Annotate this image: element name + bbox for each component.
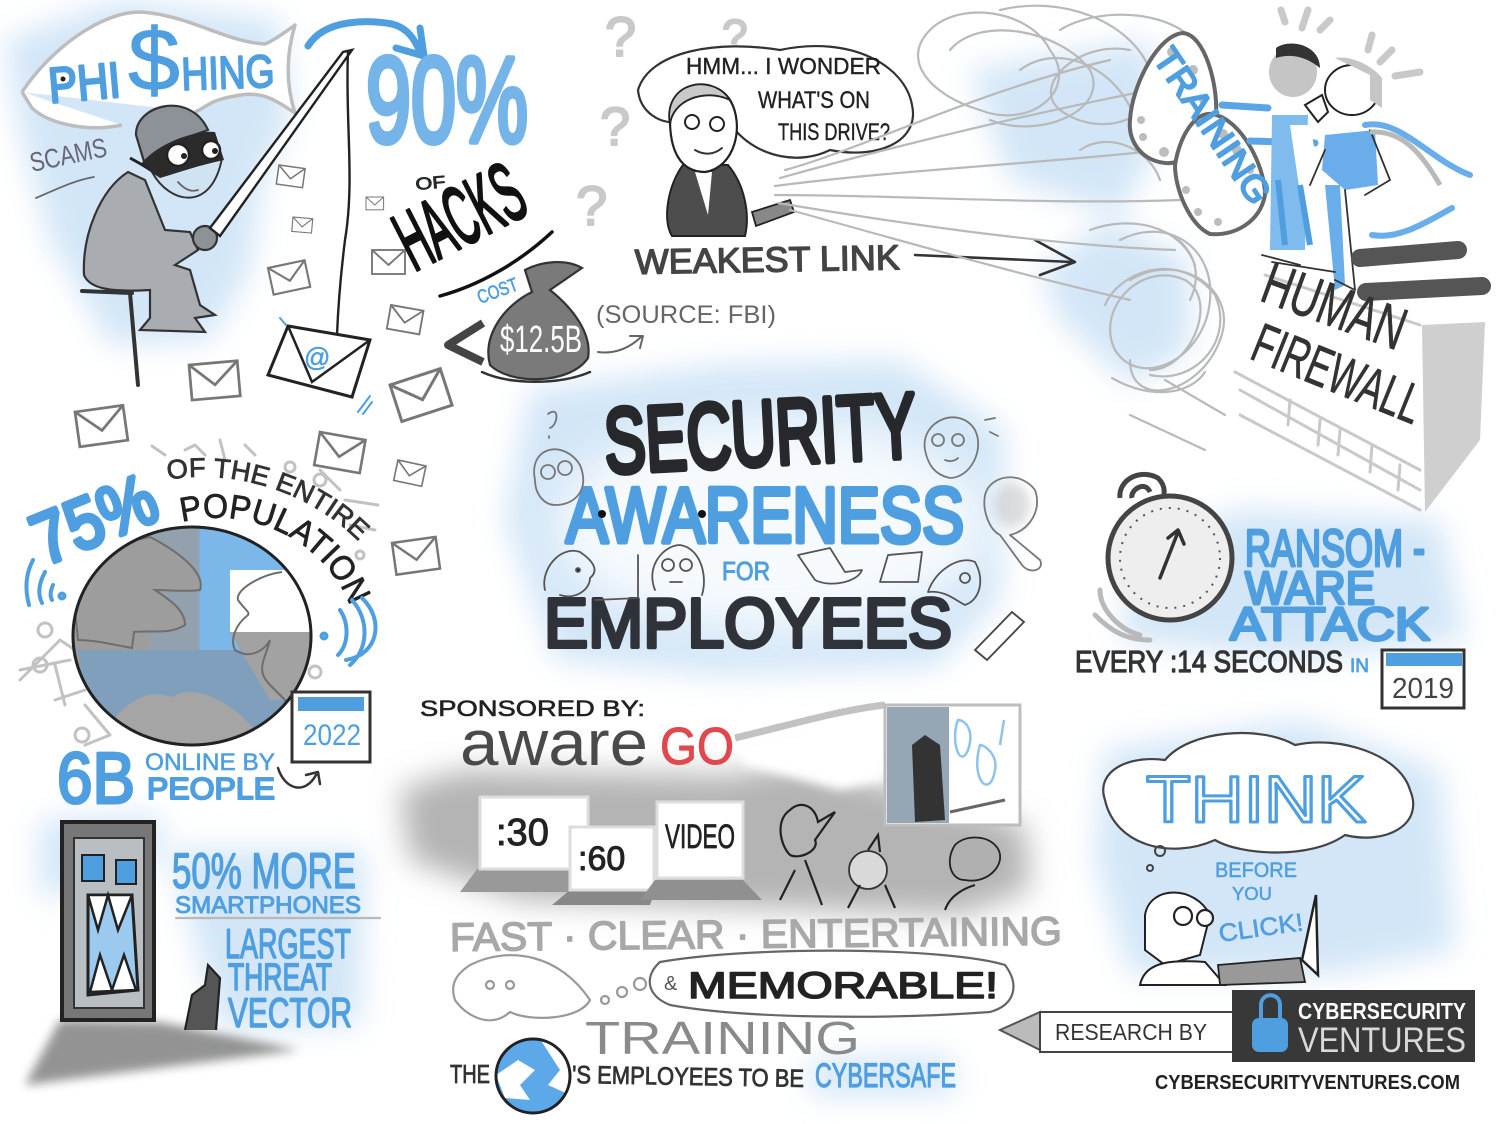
label: fast clear entertaining: FAST · CLEAR · ENTERTAINING	[450, 910, 1062, 960]
label: every 14 seconds: EVERY :14 SECONDS	[1075, 644, 1343, 679]
label: the: THE	[450, 1059, 490, 1089]
research arrow banner	[1000, 1012, 1234, 1052]
money bag	[475, 262, 590, 382]
blue arrow to stat	[308, 22, 424, 56]
heading: phishing: PHI	[46, 52, 123, 114]
icon: usb drive	[975, 612, 1024, 660]
training egg one	[1130, 33, 1216, 163]
scams underline	[36, 177, 94, 198]
memorable bubble	[650, 951, 1013, 1017]
heading: phishing: $	[128, 10, 180, 109]
panel: ransomware	[1075, 474, 1464, 708]
brick wall	[1235, 250, 1485, 512]
label: ransom-: RANSOM -	[1245, 520, 1425, 578]
logo: awarego: aware	[460, 707, 648, 779]
memorable bubble: MEMORABLE!	[688, 965, 998, 1006]
label: you: YOU	[1232, 884, 1272, 904]
label: online by: ONLINE BY	[145, 749, 275, 776]
panel: think before you click	[1103, 733, 1413, 985]
label: sponsored by: SPONSORED BY:	[420, 696, 645, 721]
label: weakest link: WEAKEST LINK	[634, 238, 900, 282]
panel: weakest link	[576, 5, 1075, 282]
logo: awarego	[460, 707, 734, 779]
smartphones rule	[176, 917, 380, 919]
statistic: 75%: 75%	[20, 459, 169, 581]
memorable bubble: &	[664, 973, 678, 995]
logo: cybersecurity ventures: CYBERSECURITY	[1298, 998, 1466, 1024]
laptop video	[640, 802, 762, 900]
heading: phishing	[46, 10, 275, 114]
connected people doodles	[20, 440, 378, 745]
logo: cybersecurity ventures: VENTURES	[1298, 1021, 1466, 1060]
arrow to firewall	[915, 240, 1075, 275]
label: vector: VECTOR	[228, 989, 352, 1036]
dog doodle	[453, 955, 646, 1020]
label: of the entire: OF THE ENTIRE	[167, 458, 370, 541]
laptop :30	[460, 797, 588, 892]
label: threat: THREAT	[228, 957, 332, 999]
audience silhouettes	[780, 805, 1000, 910]
calendar 2019: 2019	[1392, 673, 1454, 705]
label: employees to be: 'S EMPLOYEES TO BE	[572, 1061, 804, 1093]
speech bubble: THIS DRIVE?	[778, 119, 890, 146]
calendar 2022	[292, 692, 370, 762]
human figures	[1222, 10, 1470, 290]
thought cloud	[1103, 733, 1413, 852]
scattered emails	[75, 165, 452, 575]
research arrow banner: RESEARCH BY	[1055, 1019, 1207, 1045]
question marks: ?	[576, 174, 607, 237]
website url: CYBERSECURITYVENTURES.COM	[1155, 1072, 1460, 1094]
panel: human firewall	[775, 6, 1485, 512]
logo: cybersecurity ventures	[1232, 990, 1475, 1062]
calendar arrow	[278, 768, 320, 788]
laptop video: VIDEO	[665, 818, 735, 856]
title: awareness: AWARENESS	[566, 471, 964, 559]
label: attack: ATTACK	[1230, 598, 1430, 650]
source arrow	[598, 336, 643, 352]
panel: smartphones	[25, 822, 380, 1085]
floor shadow	[25, 1020, 300, 1085]
title: employees: EMPLOYEES	[544, 584, 952, 662]
gray theatre wash	[400, 705, 1030, 915]
source label: (SOURCE: FBI)	[596, 301, 776, 329]
mini globe	[496, 1039, 570, 1113]
gray scribble attacks	[775, 6, 1225, 450]
heading: phishing: HING	[181, 45, 275, 100]
monster phone	[62, 822, 154, 1020]
calendar 2022: 2022	[303, 719, 361, 752]
envelope on hook: @	[304, 342, 330, 372]
question marks: ?	[600, 97, 630, 157]
thought dots	[1147, 846, 1165, 871]
stopwatch	[1095, 474, 1232, 640]
laptop :60: :60	[578, 840, 625, 878]
label: of: OF	[415, 172, 446, 194]
globe	[70, 525, 315, 750]
panel: phishing	[22, 10, 452, 575]
statistic: 6b: 6B	[57, 739, 135, 819]
label: people: PEOPLE	[147, 771, 275, 806]
curious employee	[667, 84, 794, 236]
fishing rod and line	[210, 50, 352, 335]
panel: 90 percent of hacks	[366, 32, 776, 382]
label: ware: WARE	[1245, 562, 1375, 614]
statistic: 90%: 90%	[366, 32, 528, 168]
panel: population online	[18, 438, 380, 819]
wifi waves	[26, 560, 376, 665]
envelope on hook	[268, 318, 372, 414]
speech bubble: HMM... I WONDER	[686, 53, 881, 79]
label: scams: SCAMS	[27, 132, 110, 178]
laptop :30: :30	[496, 812, 549, 854]
projector screen	[885, 705, 1020, 825]
label: human: HUMAN	[1254, 249, 1416, 363]
laptop :60	[552, 827, 655, 905]
thief illustration	[82, 106, 224, 385]
panel: main title	[534, 375, 1041, 662]
label: hacks: HACKS	[379, 144, 540, 288]
money bag: $12.5B	[500, 319, 582, 361]
question marks: ?	[605, 5, 636, 68]
label: click: CLICK!	[1217, 908, 1305, 948]
title: security: SECURITY	[602, 375, 919, 493]
label: in: IN	[1350, 656, 1369, 677]
label: before: BEFORE	[1215, 859, 1297, 882]
question marks	[576, 5, 748, 237]
label: cybersafe: CYBERSAFE	[815, 1057, 956, 1095]
white glow behind title	[555, 420, 985, 630]
panel: research credit	[1000, 990, 1475, 1094]
arrow pointer left	[448, 323, 483, 362]
hacks underline	[440, 232, 552, 296]
person at computer	[1140, 892, 1318, 985]
label: training: TRAINING	[1145, 40, 1280, 212]
label: smartphones: SMARTPHONES	[175, 892, 361, 919]
employee doodles	[534, 412, 1041, 660]
speech bubble: WHAT'S ON	[758, 87, 870, 114]
speech bubble	[638, 46, 913, 158]
label: population: POPULATION	[180, 494, 371, 604]
title: for: FOR	[722, 556, 770, 586]
question marks: ?	[722, 10, 748, 62]
tiny figure	[185, 965, 220, 1030]
calendar 2019	[1382, 650, 1464, 708]
label: think: THINK	[1146, 762, 1366, 836]
label: training: TRAINING	[585, 1012, 860, 1064]
panel: sponsor and video training	[400, 696, 1062, 1113]
logo: awarego: GO	[660, 718, 734, 776]
training egg two	[1175, 114, 1265, 234]
fish banner	[22, 12, 295, 128]
label: largest: LARGEST	[225, 920, 351, 967]
label: 50% more: 50% MORE	[172, 843, 356, 899]
money bag: COST	[475, 274, 521, 309]
